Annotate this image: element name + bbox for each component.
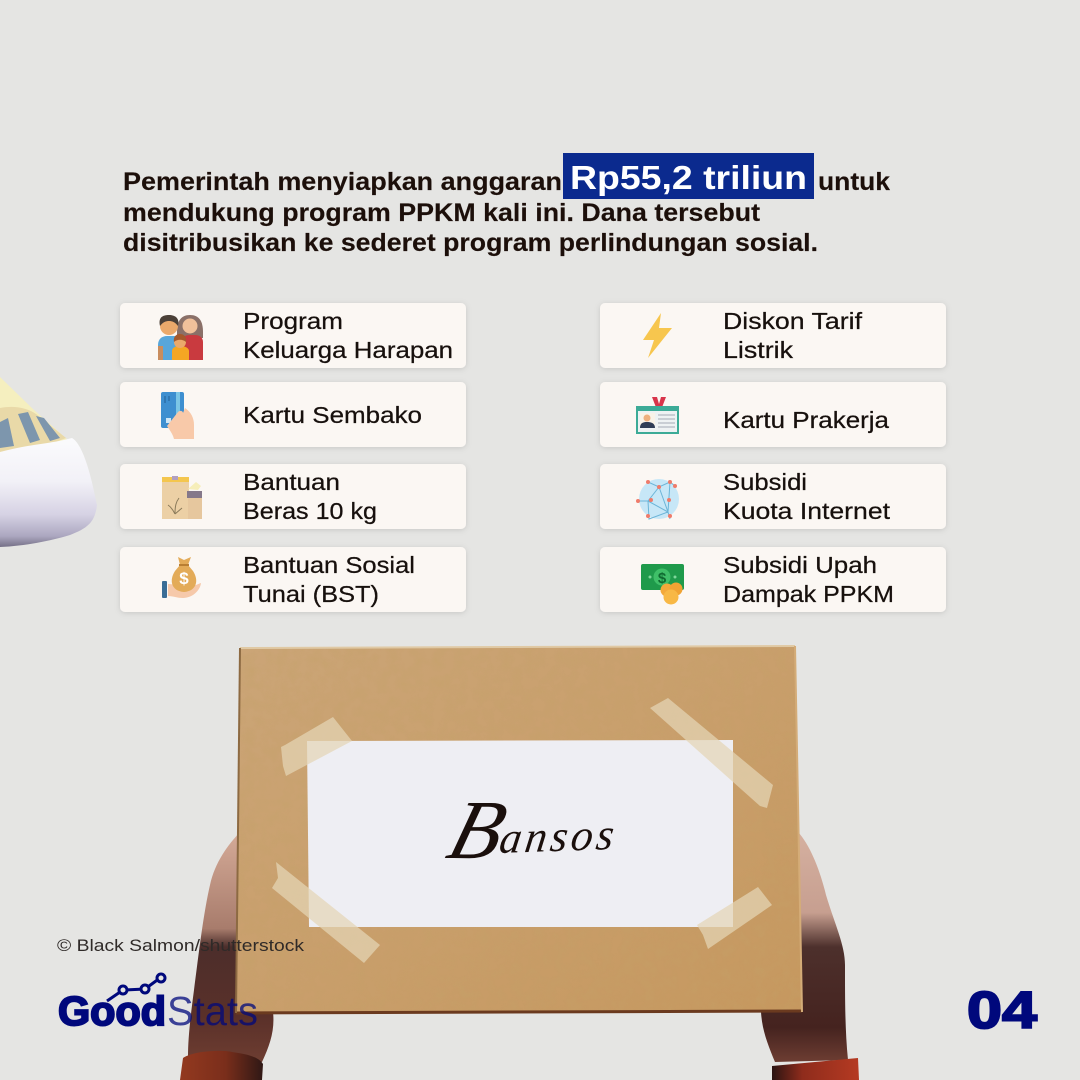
label [243, 552, 415, 607]
label [723, 552, 894, 607]
handwriting: ansos [497, 809, 618, 863]
label: Subsidi Upah [723, 552, 877, 578]
label: Tunai (BST) [243, 581, 379, 607]
page number: 04 [967, 982, 1037, 1040]
label: Beras 10 kg [243, 498, 377, 524]
label: Diskon Tarif [723, 308, 863, 334]
label: Bantuan Sosial [243, 552, 415, 578]
icon: card in hand [161, 392, 194, 439]
photo: sleeve at left edge [0, 377, 97, 547]
panel: Bantuan Beras 10 kg [120, 464, 466, 529]
panel: Kartu Prakerja [600, 382, 946, 447]
icon: family [158, 315, 203, 360]
intro paragraph: untuk [818, 168, 890, 196]
handwriting [439, 784, 618, 877]
cuff [772, 1058, 859, 1080]
highlight box [563, 153, 814, 199]
icon: id card [636, 397, 679, 434]
packing tape [272, 698, 773, 963]
icon: money bag on hand: $ [179, 569, 189, 588]
photo credit: © Black Salmon/shutterstock [57, 936, 305, 955]
icon: cash and coins: $ [658, 570, 667, 587]
intro paragraph: Pemerintah menyiapkan anggaran [123, 168, 562, 196]
label: Bantuan [243, 469, 340, 495]
label [723, 308, 863, 363]
photo: cardboard box [230, 640, 810, 1020]
label [243, 308, 453, 363]
label: Subsidi [723, 469, 807, 495]
logo: GoodStats: Good [58, 988, 166, 1034]
panel: Diskon Tarif Listrik [600, 303, 946, 368]
label [723, 469, 891, 524]
photo: left hand [180, 832, 273, 1080]
icon: globe network [636, 479, 679, 519]
panel: Subsidi Upah [600, 547, 946, 612]
label: Kartu Sembako [243, 402, 422, 428]
intro paragraph: Rp55,2 triliun [570, 159, 807, 196]
intro paragraph: mendukung program PPKM kali ini. Dana tersebut [123, 199, 761, 227]
paper label [307, 740, 733, 927]
icon: cash and coins [641, 564, 684, 604]
logo: GoodStats [58, 974, 258, 1034]
panel: Subsidi Kuota Internet [600, 464, 946, 529]
panel: Bantuan Sosial Tunai [120, 547, 466, 612]
label: Kuota Internet [723, 498, 891, 524]
label: Program [243, 308, 343, 334]
label [243, 469, 377, 524]
label: Keluarga Harapan [243, 337, 453, 363]
panel: Kartu Sembako [120, 382, 466, 447]
photo: right hand [761, 832, 859, 1080]
intro paragraph: disitribusikan ke sederet program perlindungan sosial. [123, 229, 818, 257]
intro paragraph [123, 153, 890, 257]
label: Dampak PPKM [723, 581, 894, 607]
icon: lightning bolt [643, 313, 672, 358]
logo: GoodStats: Stats [167, 988, 258, 1034]
handwriting: B [439, 784, 517, 877]
label: Listrik [723, 337, 793, 363]
label: Kartu Prakerja [723, 407, 890, 433]
panel: Program Keluarga Harapan [120, 303, 466, 368]
cuff [180, 1051, 263, 1080]
icon: rice bags [162, 476, 202, 519]
icon: money bag on hand [162, 557, 201, 598]
